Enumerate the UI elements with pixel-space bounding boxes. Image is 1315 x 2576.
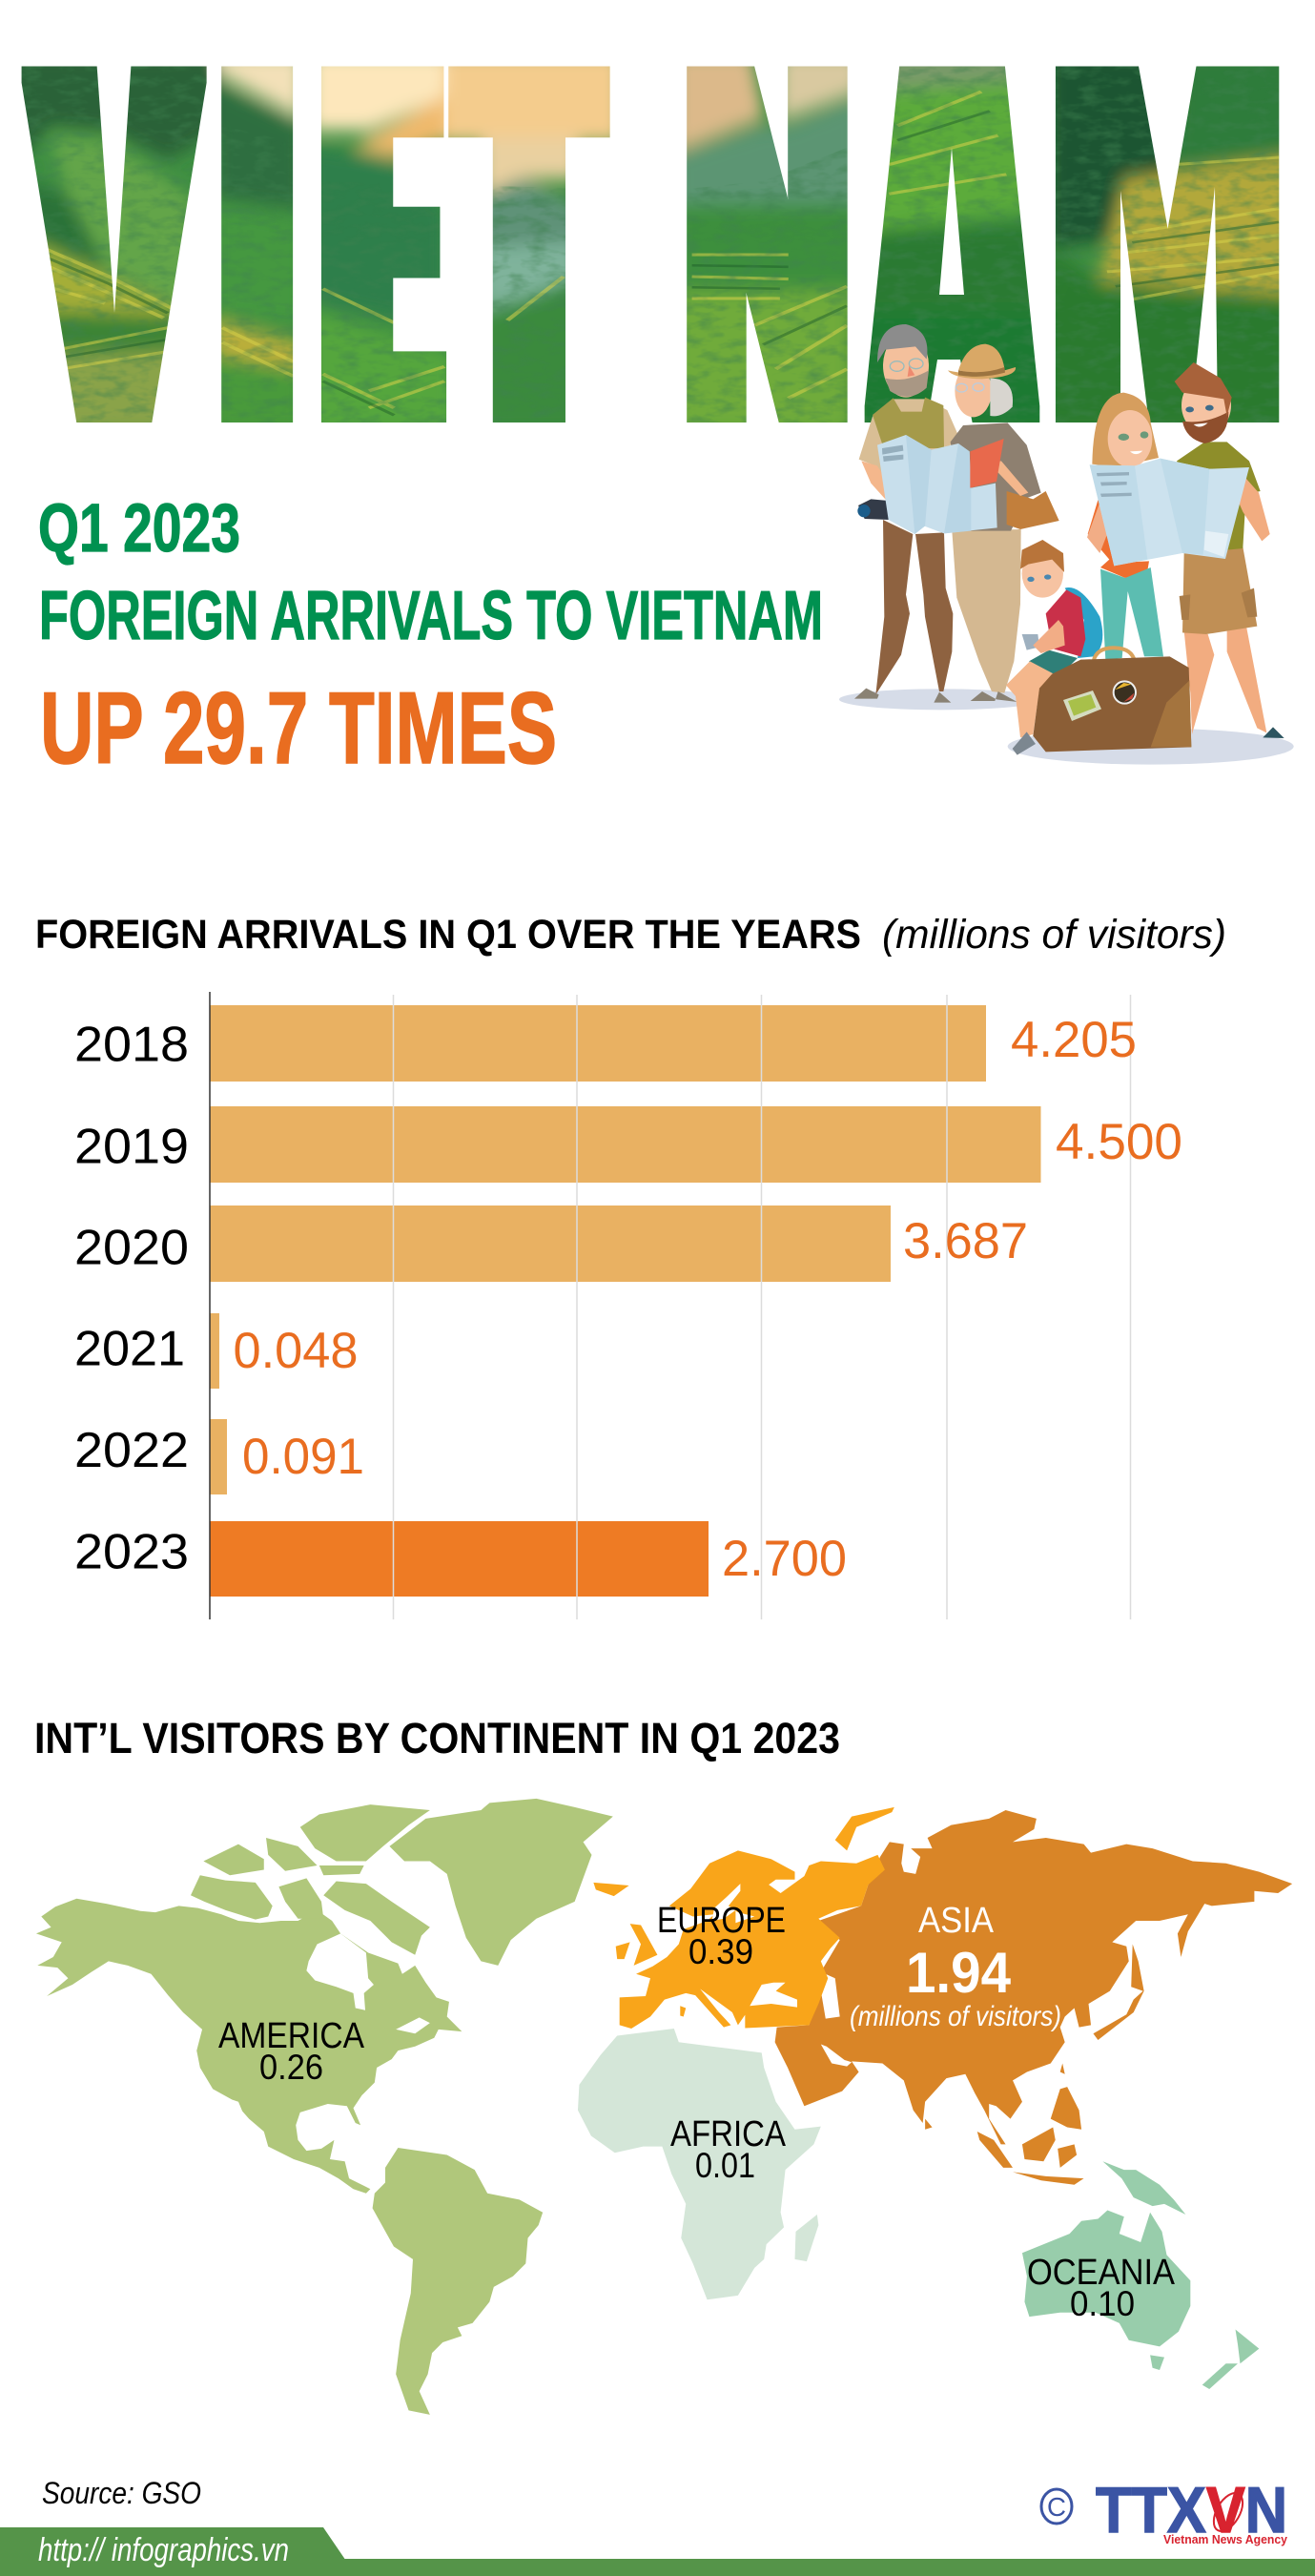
map heading: international visitors by continent: INT’L VISITORS BY CONTINENT IN Q1 2023	[34, 1714, 840, 1762]
value labels: 4.500	[1056, 1114, 1182, 1170]
bar chart: arrivals by year	[74, 992, 1182, 1619]
year labels: 2019	[74, 1120, 189, 1175]
continent: Europe	[593, 1807, 894, 2029]
world map	[36, 1799, 1292, 2415]
label: Asia	[850, 1901, 1061, 2032]
label: Asia: (millions of visitors)	[850, 2001, 1061, 2032]
figure: boy with backpack	[1006, 540, 1102, 755]
suitcase	[1033, 648, 1191, 752]
illustration: tourists with maps	[839, 324, 1294, 765]
year labels: 2023	[74, 1524, 189, 1579]
headline: up 29.7 times: UP 29.7 TIMES	[40, 670, 557, 785]
label: Africa	[670, 2114, 787, 2185]
year labels: 2022	[74, 1423, 189, 1478]
continent: Africa	[578, 2029, 821, 2299]
label: Europe	[657, 1901, 786, 1971]
figure: bearded man	[1175, 362, 1284, 738]
value labels: 4.205	[1011, 1012, 1137, 1068]
label: Asia: ASIA	[918, 1901, 995, 1941]
year labels: 2018	[74, 1018, 189, 1073]
figure: older woman	[948, 344, 1059, 702]
label: Africa: 0.01	[695, 2146, 755, 2185]
label: Asia: 1.94	[906, 1941, 1012, 2005]
year labels: 2021	[74, 1322, 185, 1377]
source: Source: GSO	[42, 2476, 201, 2510]
figure: older man	[854, 324, 958, 703]
chart heading: foreign arrivals in Q1 over the years: (millions of visitors)	[882, 912, 1226, 958]
continent: Asia	[775, 1810, 1292, 2185]
value labels: 0.048	[233, 1323, 359, 1379]
logo: TTXVN: Vietnam News Agency	[1163, 2532, 1288, 2546]
value labels: 3.687	[903, 1213, 1028, 1269]
footer url: http:// infographics.vn	[38, 2532, 289, 2568]
bars	[210, 1005, 1041, 1597]
label: America: AMERICA	[218, 2016, 365, 2056]
year labels	[74, 1018, 189, 1579]
label: Oceania: OCEANIA	[1027, 2253, 1176, 2293]
logo: TTXVN: TTXVN	[1096, 2474, 1287, 2546]
label: Oceania: 0.10	[1070, 2284, 1135, 2323]
value labels: 2.700	[722, 1531, 847, 1587]
label: Europe: 0.39	[688, 1932, 753, 1971]
heading: Q1 2023: Q1 2023	[38, 491, 240, 567]
shadow: left group	[839, 689, 1042, 710]
heading: foreign arrivals to Vietnam: FOREIGN ARRIVALS TO VIETNAM	[39, 578, 823, 654]
year labels: 2020	[74, 1221, 189, 1276]
label: Oceania	[1027, 2253, 1176, 2323]
label: America: 0.26	[259, 2048, 323, 2087]
figure: younger woman	[1087, 393, 1163, 660]
label: America	[218, 2016, 365, 2087]
map held by older couple	[877, 435, 1004, 534]
value labels: 0.091	[242, 1429, 364, 1485]
footer band	[0, 2527, 1315, 2576]
chart heading: foreign arrivals in Q1 over the years: FOREIGN ARRIVALS IN Q1 OVER THE YEARS	[35, 912, 861, 958]
label: Europe: EUROPE	[657, 1901, 786, 1941]
title: VIET NAM photo lettering	[21, 67, 1280, 422]
shadow: right group	[1008, 729, 1294, 765]
continent: America	[36, 1799, 613, 2415]
logo: TTXVN: C	[1047, 2492, 1066, 2522]
map held by younger couple	[1090, 459, 1249, 566]
value labels	[233, 1012, 1182, 1587]
continent: Oceania	[1022, 2161, 1259, 2389]
label: Africa: AFRICA	[670, 2114, 787, 2154]
